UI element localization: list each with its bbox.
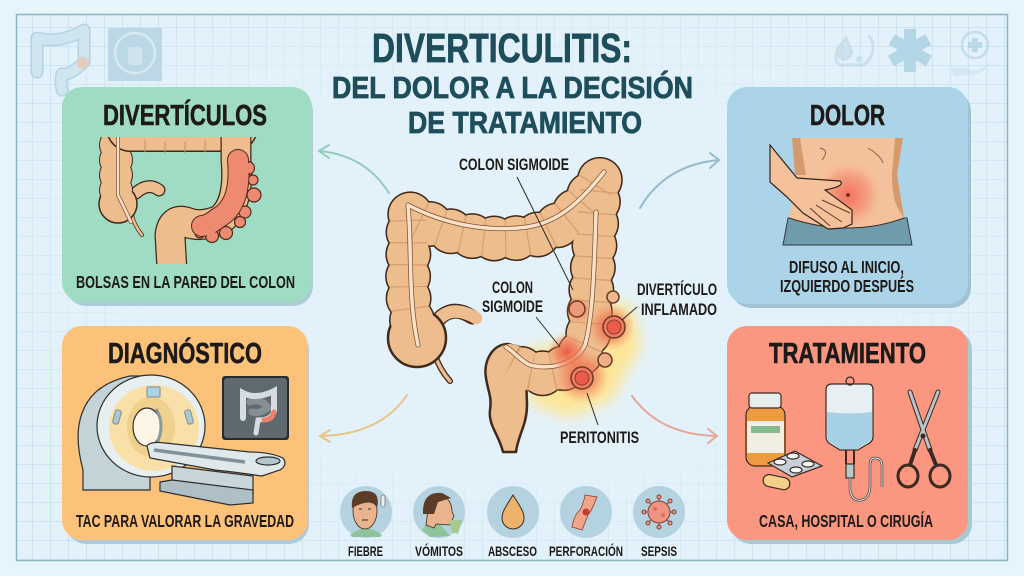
- caption: divertículos: BOLSAS EN LA PARED DEL COLON: [76, 272, 295, 292]
- complication: fiebre: FIEBRE: [348, 543, 383, 559]
- arrow: to diagnóstico: [320, 395, 407, 442]
- illustration: CT image: [222, 376, 289, 440]
- title: DIVERTICULITIS:: [372, 25, 632, 71]
- inflammation glow: [525, 300, 642, 418]
- panel: divertículos: [62, 87, 313, 306]
- complication: absceso: ABSCESO: [488, 543, 537, 559]
- label: colon sigmoide: [482, 279, 560, 347]
- arrow: to dolor: [640, 153, 719, 208]
- label: colon sigmoide: COLON: [492, 279, 533, 297]
- ghost icon: scan: [108, 28, 162, 81]
- complication: vómitos: [413, 486, 465, 559]
- illustration: IV bag: [826, 377, 882, 500]
- caption: diagnóstico: TAC PARA VALORAR LA GRAVEDAD: [76, 511, 294, 531]
- ghost icon: hand with cross: [950, 32, 992, 76]
- title: DEL DOLOR A LA DECISIÓN: [332, 69, 693, 105]
- arrow: to divertículos: [319, 145, 389, 193]
- ghost icon: star of life: [888, 29, 932, 72]
- label: peritonitis: PERITONITIS: [560, 429, 639, 447]
- label: colon sigmoide: SIGMOIDE: [482, 298, 543, 316]
- heading: divertículos: DIVERTÍCULOS: [103, 98, 267, 132]
- complication: perforación: PERFORACIÓN: [549, 542, 623, 559]
- complication: fiebre: [340, 486, 392, 559]
- label: peritonitis: [560, 393, 639, 447]
- caption: dolor: DIFUSO AL INICIO,: [789, 257, 904, 277]
- complication: sepsis: SEPSIS: [641, 543, 677, 559]
- heading: dolor: DOLOR: [810, 100, 885, 132]
- illustration: abdomen with hand: [770, 138, 912, 245]
- panel: dolor: IZQUIERDO DESPUÉS: [780, 275, 914, 296]
- diverticula: [569, 291, 625, 389]
- illustration: medicine bottle and pills: [746, 393, 822, 491]
- label: colon sigmoide top: COLON SIGMOIDE: [459, 156, 569, 174]
- complication: vómitos: VÓMITOS: [415, 542, 463, 559]
- central colon illustration: [388, 172, 642, 452]
- label: colon sigmoide top: [459, 156, 573, 290]
- label: divertículo inflamado: INFLAMADO: [641, 301, 717, 319]
- illustration: colon with diverticula: [99, 128, 261, 270]
- label: divertículo inflamado: DIVERTÍCULO: [637, 280, 717, 299]
- ghost icon: organ: [836, 36, 873, 65]
- complication: perforación: [549, 486, 623, 559]
- panel: tratamiento: [727, 326, 972, 544]
- title: [332, 25, 693, 140]
- illustration: surgical scissors: [898, 392, 950, 487]
- complication: sepsis: [633, 486, 685, 559]
- illustration: CT scanner: [78, 375, 285, 505]
- ghost icon: colon: [37, 30, 89, 90]
- inflamed areas: [547, 296, 635, 404]
- ileum and appendix: [435, 311, 476, 381]
- panel: dolor: [727, 87, 971, 308]
- complication: absceso: [487, 486, 539, 559]
- heading: diagnóstico: DIAGNÓSTICO: [108, 336, 262, 370]
- title: DE TRATAMIENTO: [408, 105, 642, 140]
- heading: tratamiento: TRATAMIENTO: [769, 338, 926, 370]
- caption: tratamiento: CASA, HOSPITAL O CIRUGÍA: [759, 510, 933, 531]
- label: divertículo inflamado: [622, 280, 717, 320]
- colon body: [388, 172, 604, 452]
- arrow: to tratamiento: [632, 396, 717, 443]
- panel: diagnóstico: [62, 326, 309, 544]
